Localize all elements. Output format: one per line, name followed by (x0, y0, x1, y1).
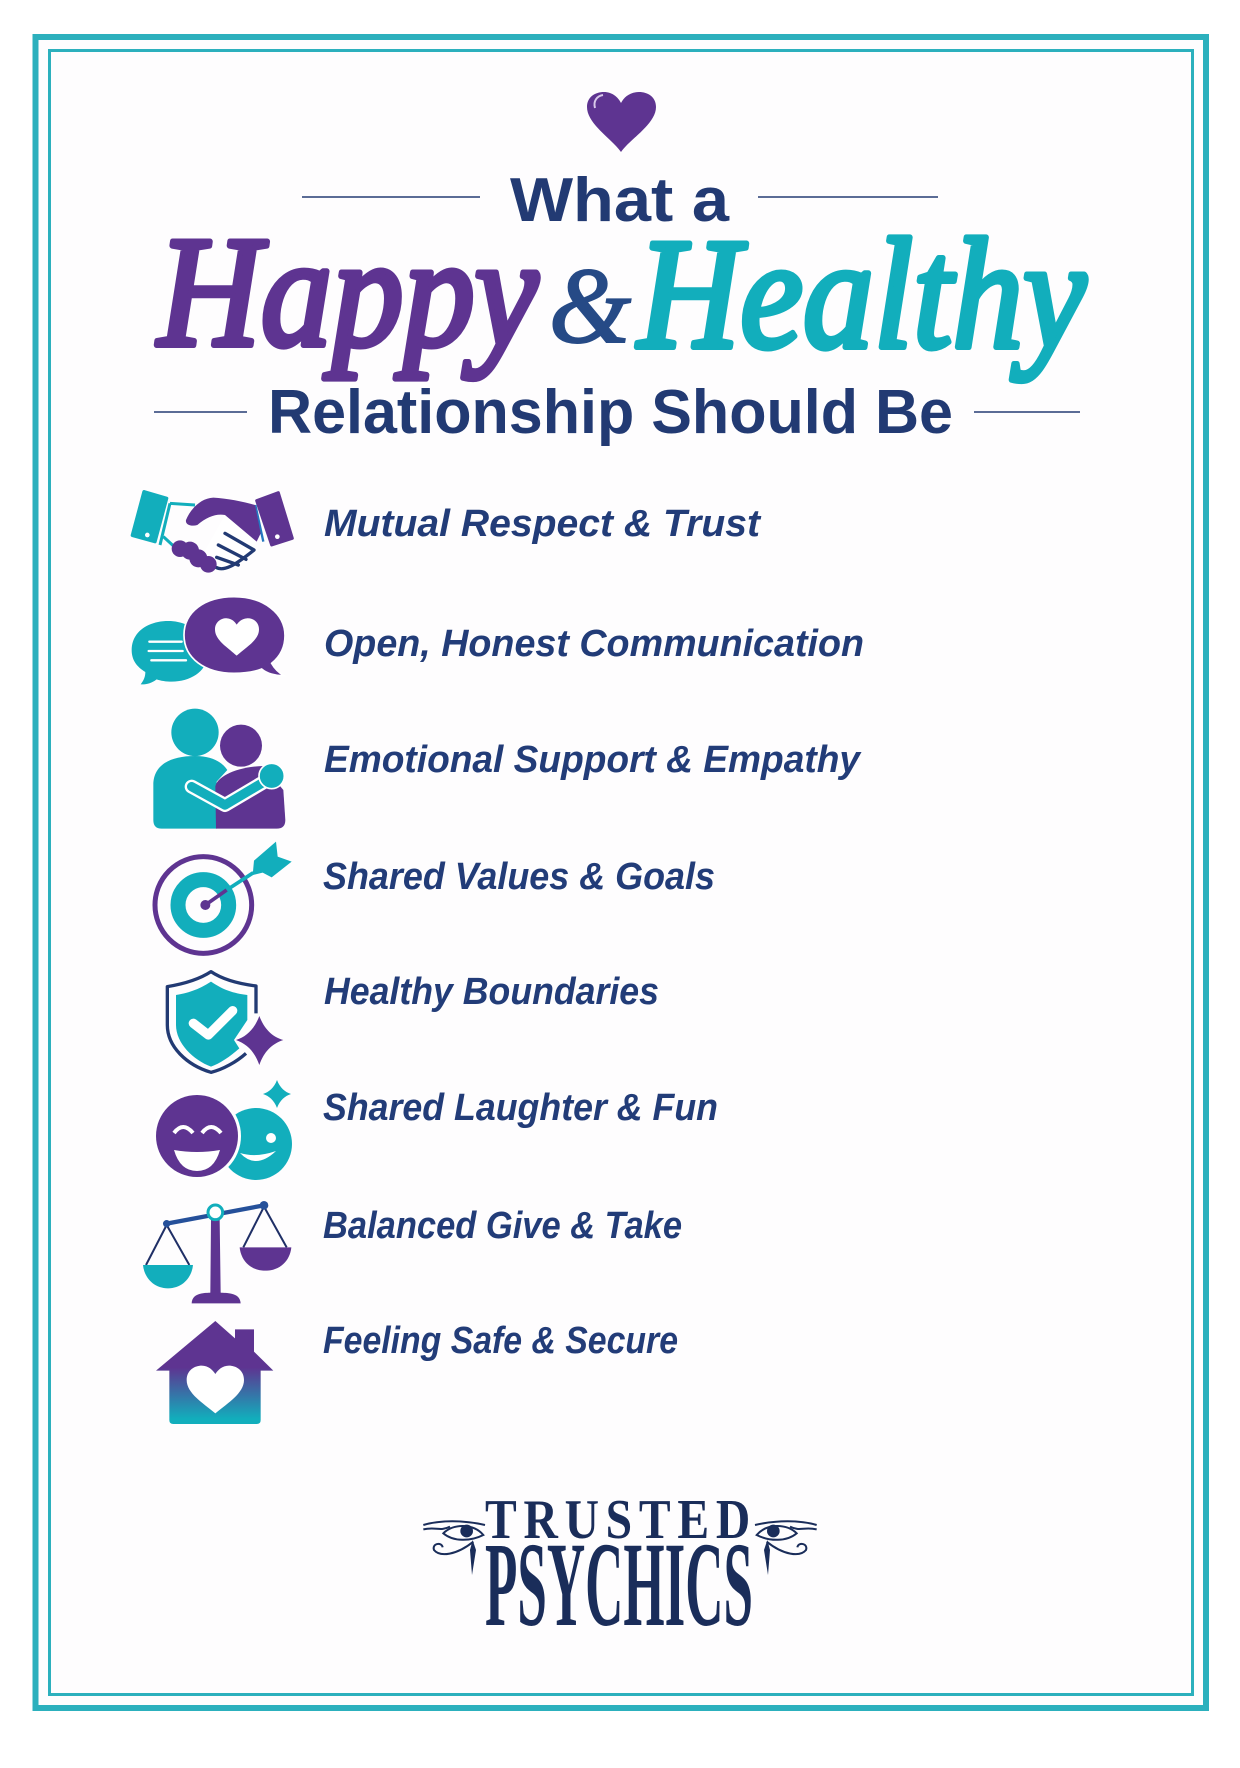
label: Open, Honest Communication (324, 623, 864, 665)
list item 7: balance (143, 1201, 682, 1303)
icon: hugging figures (153, 709, 285, 829)
heading: Happy: Happy (156, 205, 539, 380)
icon: handshake (132, 492, 292, 573)
list item 3: emotional support (153, 709, 862, 829)
label: Emotional Support & Empathy (324, 739, 862, 781)
icon: left eye (423, 1521, 485, 1575)
heading: What a: What a (510, 166, 730, 235)
rule right of What a (758, 196, 938, 198)
icon: speech bubbles (132, 597, 285, 684)
logo wordmark top: TRUSTED (485, 1490, 750, 1551)
rule left of Relationship (154, 411, 247, 413)
heading: Relationship Should Be: Relationship Should Be (268, 378, 953, 447)
list item 5: boundaries (167, 971, 659, 1072)
heading: Healthy: Healthy (636, 207, 1087, 382)
icon: right eye (755, 1521, 817, 1575)
label: Mutual Respect & Trust (324, 503, 761, 545)
icon: house with heart (156, 1321, 273, 1424)
rule left of What a (302, 196, 480, 198)
label: Feeling Safe & Secure (323, 1320, 678, 1362)
logo: Trusted Psychics (423, 1490, 817, 1652)
list item 1: mutual respect (132, 492, 761, 573)
icon: laughing faces (153, 1080, 292, 1180)
heading: ampersand: & (549, 247, 631, 366)
list item 8: safety (156, 1320, 678, 1424)
label: Balanced Give & Take (323, 1205, 682, 1247)
list item 2: communication (132, 597, 864, 684)
label: Healthy Boundaries (324, 971, 659, 1013)
icon: target and arrow (155, 842, 292, 953)
icon: balance scales (143, 1201, 291, 1303)
list item 6: laughter (153, 1080, 718, 1180)
logo: Trusted Psychics: PSYCHICS (485, 1518, 753, 1652)
label: Shared Laughter & Fun (323, 1087, 718, 1129)
rule right of Relationship (974, 411, 1080, 413)
title block (154, 92, 1087, 447)
label: Shared Values & Goals (323, 856, 715, 898)
icon: heart (587, 92, 656, 152)
list item 4: shared values (155, 842, 715, 953)
icon: shield with check and sparkle (167, 972, 283, 1072)
